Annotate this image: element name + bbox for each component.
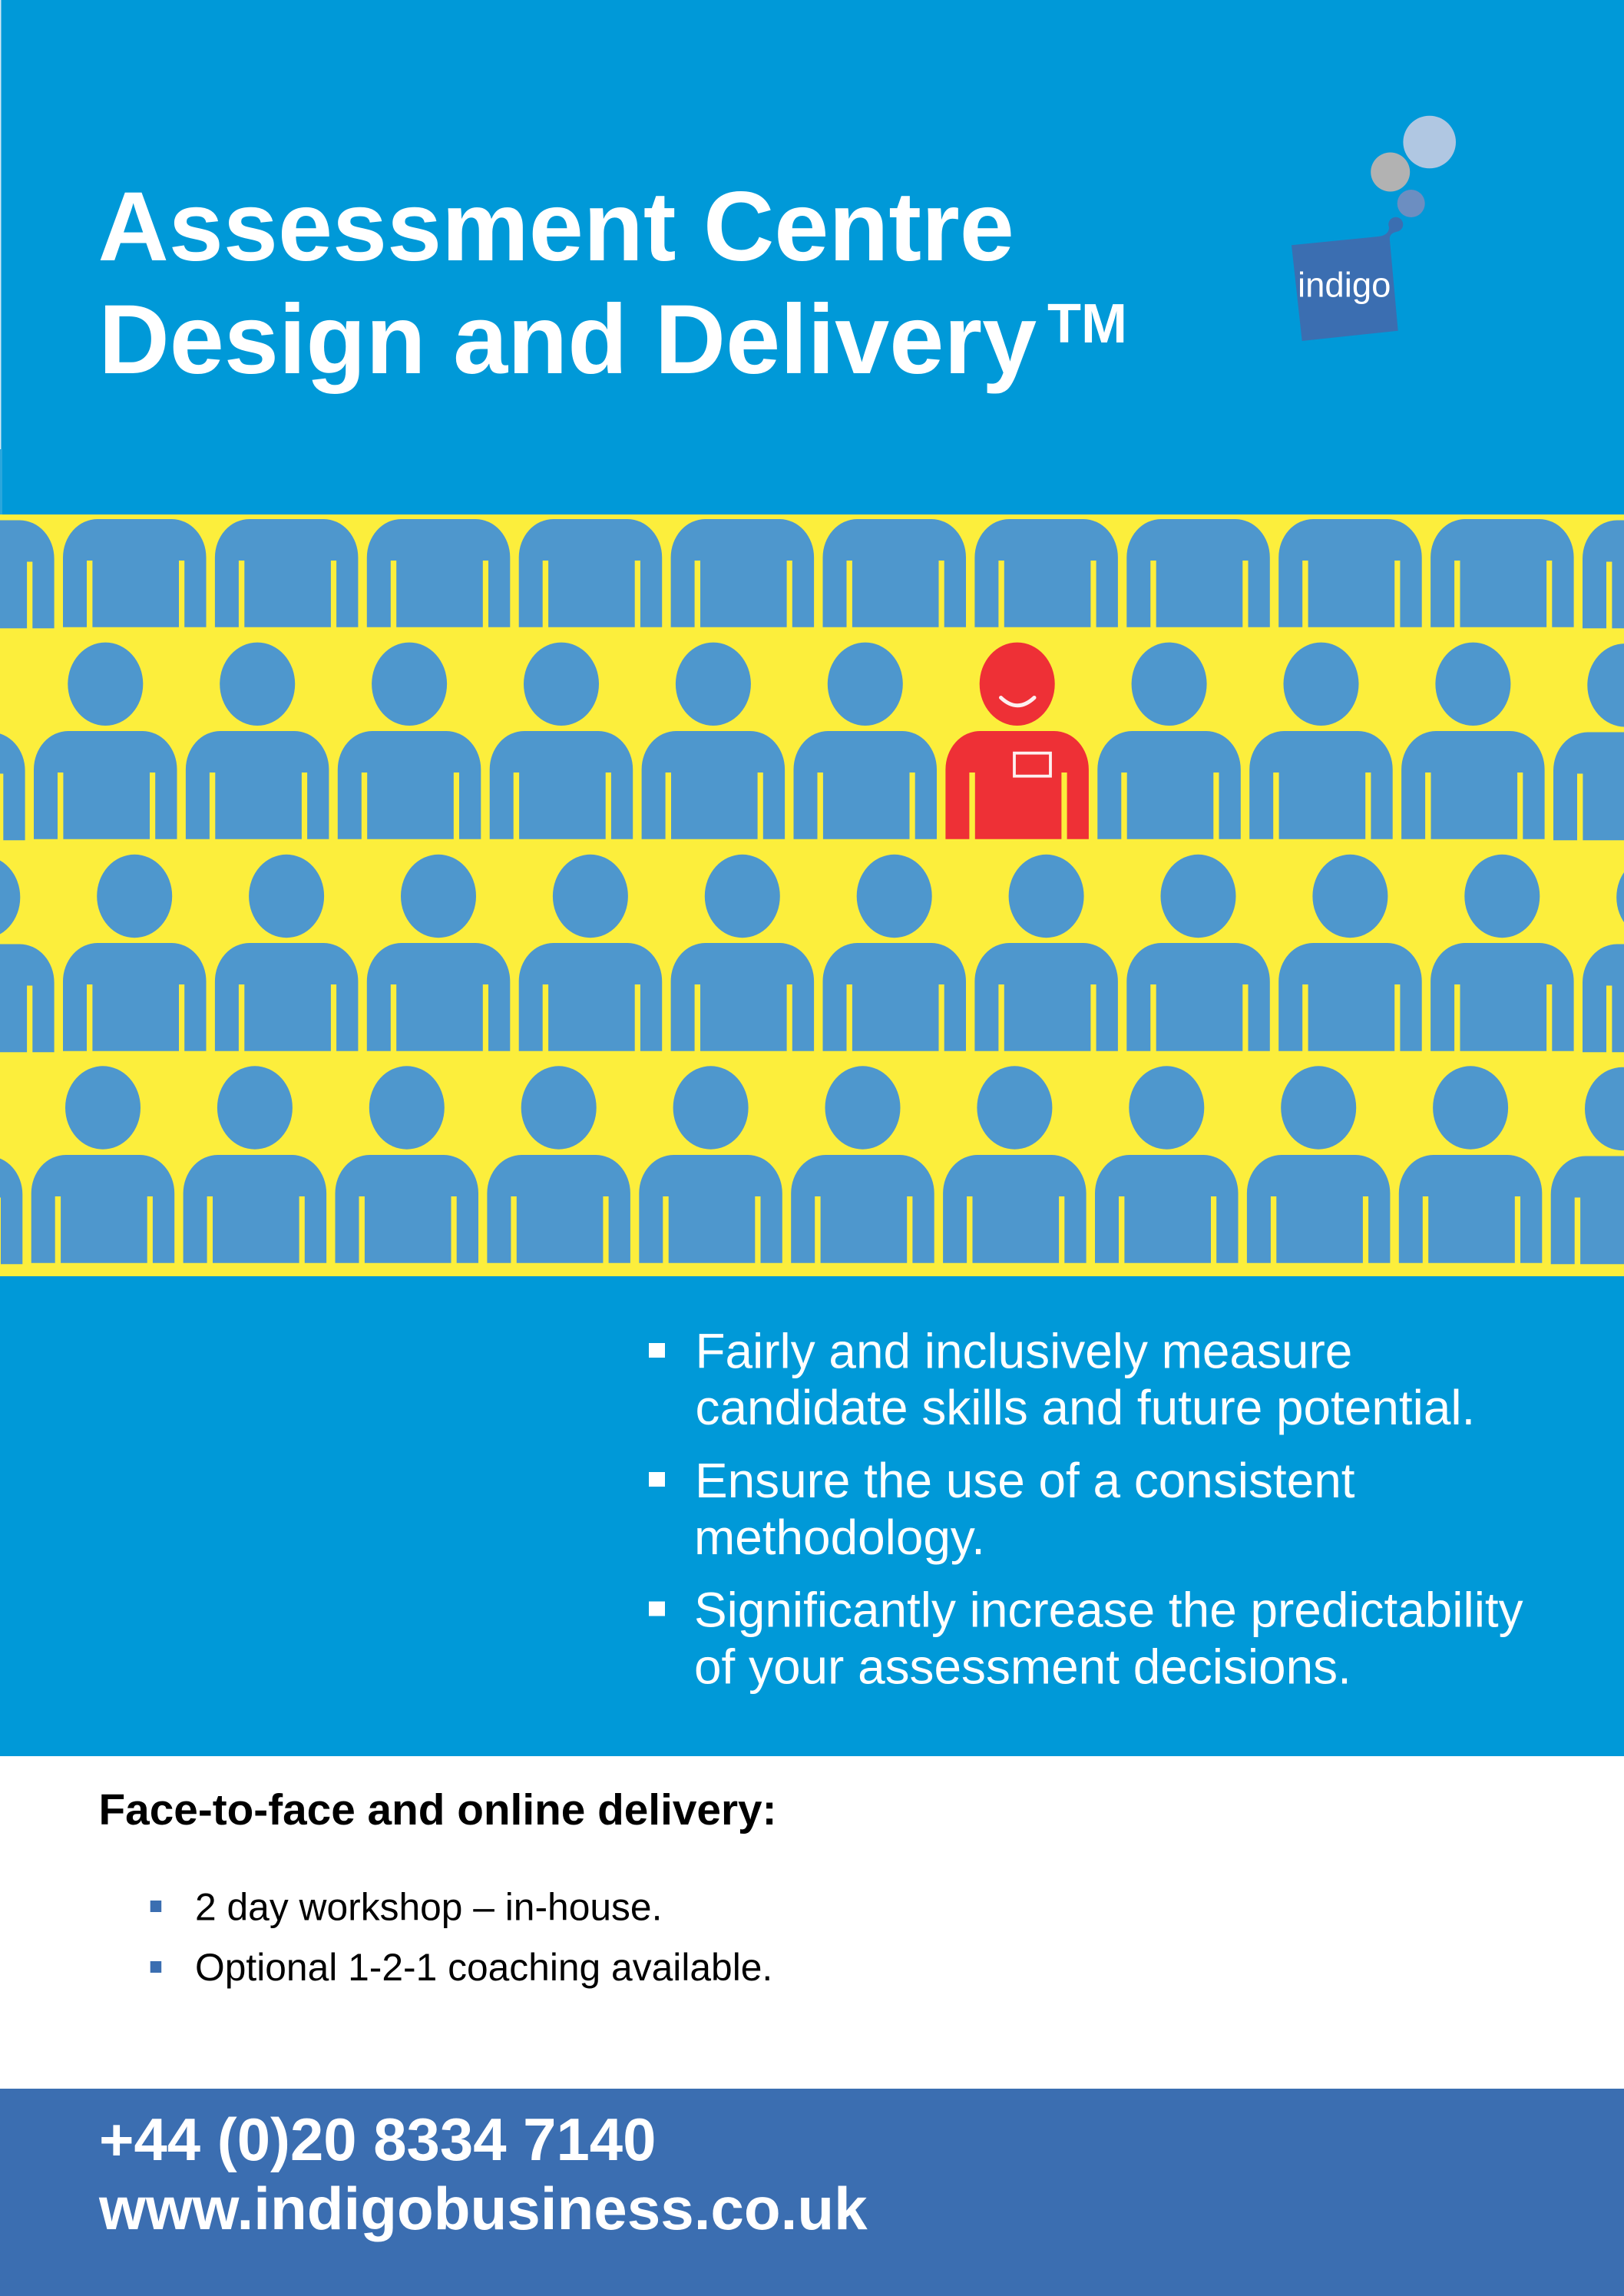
title — [98, 172, 1127, 395]
benefit bullet 3 — [649, 1582, 1523, 1694]
title: Assessment Centre — [98, 172, 1014, 282]
benefit bullet 1 — [649, 1324, 1475, 1435]
benefit bullet 3: of your assessment decisions. — [694, 1639, 1351, 1694]
title: TM — [1047, 293, 1127, 355]
delivery panel — [0, 1756, 1624, 2089]
logo: indigo: indigo — [1298, 266, 1391, 305]
benefits panel — [0, 1276, 1624, 1756]
benefit bullet 1: Fairly and inclusively measure — [696, 1324, 1352, 1379]
row of people 4 — [0, 1066, 1624, 1264]
highlighted red person — [945, 643, 1089, 839]
benefit bullet 2: Ensure the use of a consistent — [695, 1453, 1355, 1508]
row of people 2 — [0, 643, 1624, 840]
benefit bullet 2: methodology. — [694, 1510, 985, 1565]
header panel — [0, 0, 1624, 514]
contact footer — [0, 2089, 1624, 2296]
row of people 1 — [0, 519, 1624, 628]
crowd band — [0, 514, 1624, 1276]
delivery item 2: Optional 1-2-1 coaching available. — [195, 1946, 772, 1989]
benefit bullet 3: Significantly increase the predictability — [694, 1582, 1523, 1637]
delivery item 1: 2 day workshop – in-house. — [195, 1886, 662, 1929]
benefit bullet 1: candidate skills and future potential. — [696, 1380, 1475, 1435]
website: www.indigobusiness.co.uk — [98, 2175, 868, 2242]
phone number: +44 (0)20 8334 7140 — [99, 2106, 656, 2173]
delivery heading: Face-to-face and online delivery: — [98, 1786, 777, 1834]
logo: indigo — [1292, 116, 1456, 341]
title: Design and Delivery — [98, 285, 1037, 395]
row of people 3 — [0, 855, 1624, 1052]
benefit bullet 2 — [649, 1453, 1355, 1565]
